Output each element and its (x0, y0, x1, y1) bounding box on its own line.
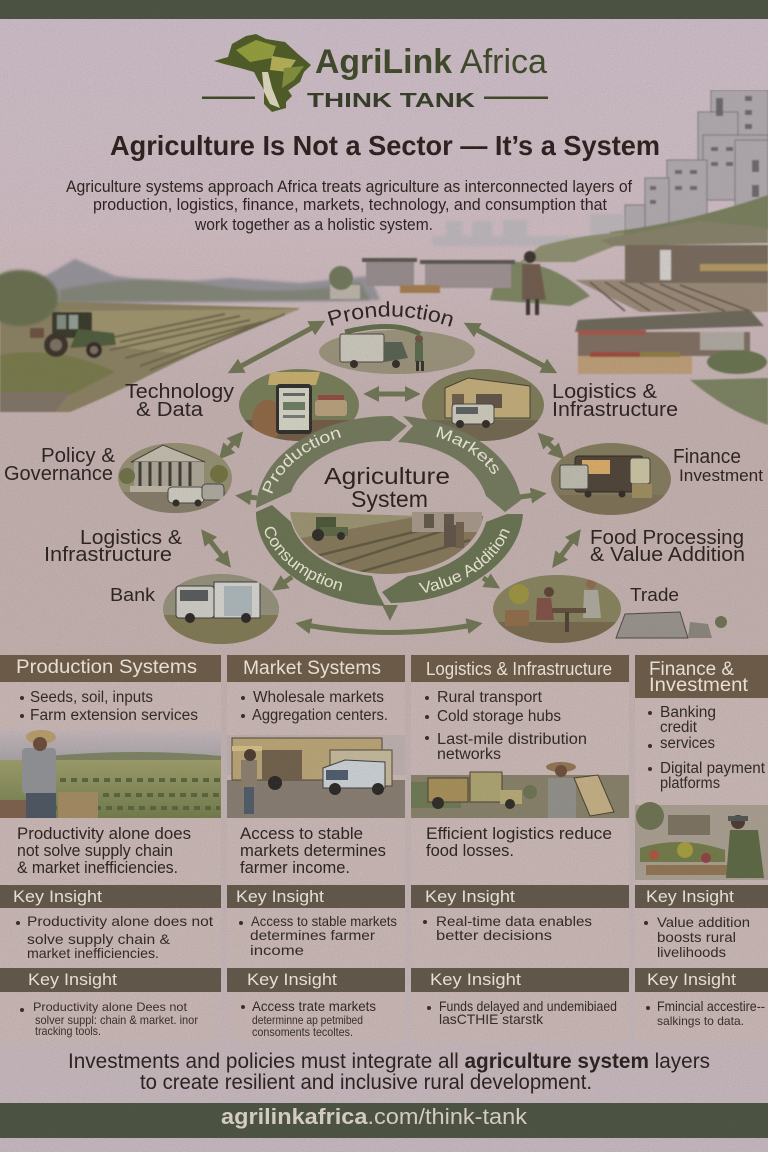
segment: production: Production (262, 430, 341, 494)
bullet list (241, 689, 388, 724)
takeaway text (240, 824, 386, 877)
key insight one: Key Insight (646, 888, 734, 906)
key insight two: Funds delayed and undemibiaed (439, 998, 617, 1014)
bullet list: Farm extension services (30, 707, 198, 724)
bullet list: services (660, 735, 715, 752)
takeaway text: not solve supply chain (17, 841, 173, 860)
key insight two (635, 968, 768, 1028)
left field (0, 270, 300, 412)
arrow: logistics to finance (541, 436, 561, 456)
illustration: rural transport (411, 762, 629, 818)
logo wordmark: Africa (460, 43, 547, 81)
key insight one (227, 885, 405, 958)
label: food processing: & Value Addition (590, 544, 745, 566)
key insight one: Key Insight (425, 888, 515, 906)
distant hills (0, 259, 380, 305)
bullet list: Banking (660, 704, 716, 721)
label: technology and data: Technology (125, 381, 234, 403)
distant buildings (329, 258, 515, 299)
segment: production (256, 416, 407, 508)
label: finance investment: Investment (679, 466, 763, 485)
circle: finance and investment (551, 443, 671, 517)
center scene (290, 512, 484, 574)
label: food processing (590, 527, 745, 566)
segment: markets: Markets (436, 426, 499, 474)
small truck beside trade (616, 612, 727, 638)
segment: markets (398, 416, 521, 512)
key insight one: income (250, 942, 304, 958)
key insight one: better decisions (436, 927, 552, 943)
key insight two: consoments tecoltes. (252, 1025, 353, 1039)
center label: System (351, 486, 428, 512)
heading: Finance & (649, 659, 734, 680)
arrow: logistics lower left (204, 533, 228, 564)
label: logistics and infrastructure lower (44, 527, 183, 566)
key insight two: salkings to data. (657, 1014, 744, 1028)
skyline (432, 90, 768, 246)
system diagram (4, 301, 763, 644)
key insight one: solve supply chain & (27, 931, 171, 947)
key insight one: Real-time data enables (436, 913, 592, 929)
center label: Agriculture (324, 463, 450, 489)
bullet list: networks (437, 746, 501, 763)
label: bank: Bank (110, 585, 156, 605)
key insight one: Value addition (657, 914, 750, 930)
center label (324, 463, 450, 512)
key insight two: Key Insight (247, 971, 337, 989)
key insight two (411, 968, 629, 1027)
circle: technology and data (239, 369, 360, 442)
ring: four system segments (256, 416, 523, 606)
key insight one (0, 885, 221, 961)
key insight one: Productivity alone does not (27, 913, 213, 929)
label: policy and governance (4, 445, 116, 485)
bullet list: Cold storage hubs (437, 708, 561, 725)
label: technology and data: & Data (136, 399, 204, 421)
logo: Africa tree (214, 34, 311, 112)
key insight two: tracking tools. (35, 1024, 101, 1038)
bullet list: Seeds, soil, inputs (30, 689, 153, 706)
segment: consumption: Consumption (264, 526, 342, 591)
arrow: bottom curve (300, 624, 478, 632)
tractor (30, 312, 116, 358)
arrow: technology to logistics (368, 392, 416, 396)
footer band (0, 1103, 768, 1138)
takeaway text (426, 824, 612, 860)
intro paragraph: Agriculture systems approach Africa treats agriculture as interconnected layers of (66, 177, 632, 196)
arrow: production to technology (232, 323, 321, 371)
key insight one (635, 885, 768, 960)
arrow: food processing lower right (555, 533, 578, 564)
bullet list: Aggregation centers. (252, 707, 388, 724)
heading: Logistics & Infrastructure (426, 659, 612, 679)
logo think tank line: THINK TANK (307, 90, 476, 112)
takeaway text (17, 824, 191, 877)
takeaway text: markets determines (240, 841, 386, 860)
illustration: market trucks (227, 735, 405, 818)
label: finance investment: Finance (673, 446, 741, 468)
label: policy and governance: Governance (4, 463, 113, 485)
key insight two: Productivity alone Dees not (33, 1000, 188, 1014)
heading: Investment (649, 675, 749, 696)
circle: bank (163, 574, 279, 645)
bullet list (648, 704, 766, 792)
label: food processing: Food Processing (590, 527, 744, 549)
circle: trade (493, 575, 621, 645)
key insight one (411, 885, 629, 943)
logo wordmark: AgriLink (315, 43, 452, 81)
takeaway text: farmer income. (240, 858, 350, 877)
closing statement: Investments and policies must integrate all agriculture system layers (68, 1050, 710, 1073)
panel: production systems (0, 655, 221, 1042)
takeaway text: Efficient logistics reduce (426, 824, 612, 843)
arrow: ring to bank (276, 577, 292, 588)
intro paragraph (66, 177, 632, 234)
heading (411, 655, 629, 682)
label: logistics and infrastructure lower: Logistics & (80, 527, 183, 549)
key insight two: Access trate markets (252, 998, 376, 1014)
panel: market systems (227, 655, 405, 1042)
arrow: ring downward (388, 605, 392, 616)
label: technology and data (125, 381, 234, 421)
footer band: agrilinkafrica .com/think-tank (221, 1104, 528, 1129)
bullet list: Rural transport (437, 689, 543, 706)
illustration: vendor stall (635, 802, 768, 880)
bullet list (20, 689, 198, 724)
closing statement (68, 1050, 710, 1094)
key insight two: Key Insight (430, 971, 521, 989)
title block (66, 34, 660, 234)
key insight one: Key Insight (13, 888, 102, 906)
panel: logistics and infrastructure (411, 655, 629, 1042)
label: logistics and infrastructure lower: Infrastructure (44, 544, 172, 566)
key insight two: Key Insight (647, 971, 736, 989)
takeaway text: Productivity alone does (17, 824, 191, 843)
key insight two (227, 968, 405, 1039)
heading (635, 655, 768, 698)
label: policy and governance: Policy & (41, 445, 116, 467)
logo wordmark (315, 43, 547, 81)
closing statement: to create resilient and inclusive rural development. (140, 1071, 592, 1094)
roadside shop (575, 310, 768, 425)
key insight one: boosts rural (657, 929, 736, 945)
arrow: ring to finance (520, 494, 542, 497)
heading: Market Systems (243, 658, 381, 679)
key insight two: solver suppl: chain & market. inor (35, 1013, 198, 1027)
arrow: technology to policy (222, 435, 240, 456)
label: logistics and infrastructure upper (552, 381, 678, 421)
bullet list: credit (660, 719, 698, 736)
key insight two: lasCTHIE starstk (439, 1011, 544, 1027)
top band (0, 0, 768, 19)
bullet list: Digital payment (660, 760, 766, 777)
illustration: farmer in field (0, 730, 221, 818)
bullet list: Wholesale markets (253, 689, 384, 706)
key insight one: livelihoods (657, 944, 726, 960)
takeaway text: Access to stable (240, 824, 363, 843)
circle: policy and governance (118, 443, 232, 514)
bullet list (425, 689, 587, 763)
takeaway text: food losses. (426, 841, 514, 860)
heading: Production Systems (16, 657, 197, 678)
circle: logistics and infrastructure (422, 369, 544, 442)
bullet list: Last-mile distribution (437, 731, 587, 748)
heading (0, 655, 221, 682)
right market and furrowed field (490, 195, 768, 312)
panel: finance and investment (635, 655, 768, 1042)
segment: value addition (382, 514, 523, 603)
key insight one: Access to stable markets (251, 913, 397, 929)
key insight one: market inefficiencies. (27, 945, 159, 961)
key insight two (0, 968, 221, 1038)
segment: value addition: Value Addition (418, 529, 510, 593)
segment: consumption (256, 505, 384, 606)
key insight two: Key Insight (28, 971, 117, 989)
arrow: production to logistics (468, 325, 553, 371)
intro paragraph: work together as a holistic system. (194, 215, 433, 234)
key insight one: determines farmer (250, 927, 375, 943)
label: trade: Trade (630, 585, 679, 605)
scene: production (319, 326, 475, 374)
landscape illustration (0, 90, 768, 425)
standing person (522, 251, 546, 315)
bullet list: platforms (660, 775, 720, 792)
label: production: Pronduction (328, 301, 453, 327)
key insight one: Key Insight (236, 888, 324, 906)
label: logistics and infrastructure upper: Infrastructure (552, 399, 678, 421)
key insight two: determinne ap petmibed (252, 1013, 363, 1027)
heading (227, 655, 405, 682)
label: logistics and infrastructure upper: Logistics & (552, 381, 658, 403)
arrow: ring to policy (240, 496, 257, 498)
label: finance investment (673, 446, 763, 485)
arrow: ring to trade (483, 578, 496, 586)
main heading: Agriculture Is Not a Sector — It’s a System (110, 130, 660, 161)
intro paragraph: production, logistics, finance, markets, technology, and consumption that (93, 195, 607, 214)
takeaway text: & market inefficiencies. (17, 858, 178, 877)
